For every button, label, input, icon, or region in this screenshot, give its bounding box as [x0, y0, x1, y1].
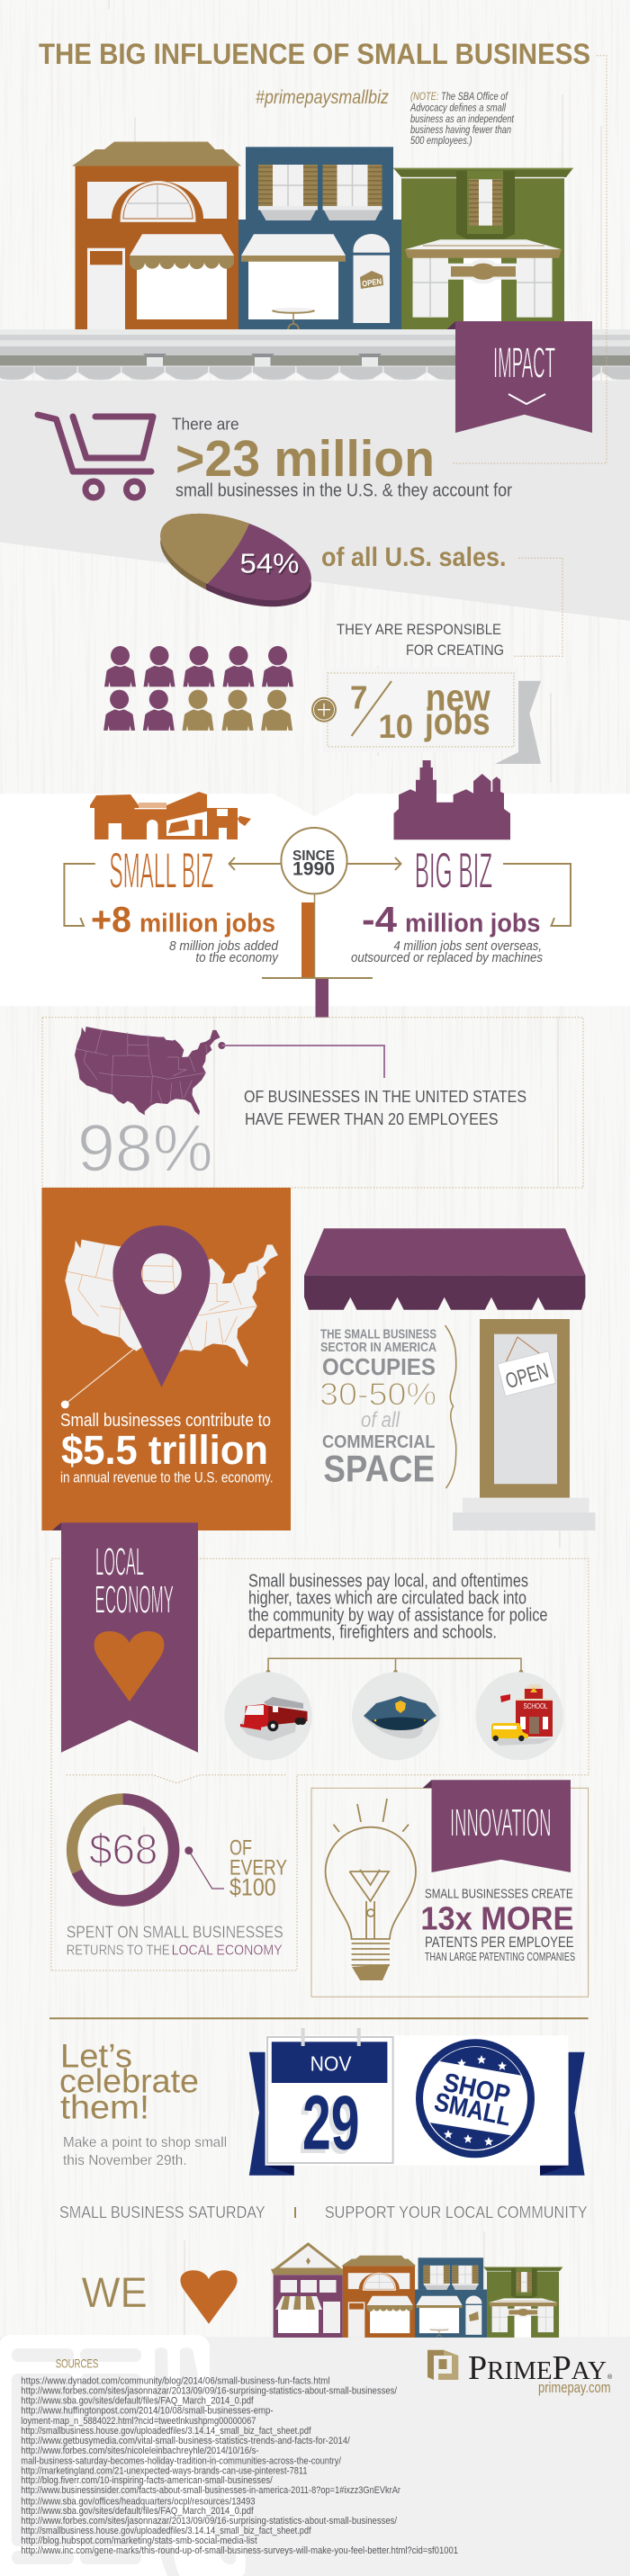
chart: ten person pictogram — [104, 646, 293, 731]
connector: services tree — [266, 1658, 523, 1674]
callout: 7 of 10 new jobs — [311, 668, 541, 764]
note: SBA definition: 500 employees.) — [410, 136, 472, 147]
icon: police hat — [352, 1672, 439, 1760]
note: SBA definition: Advocacy defines a small — [410, 103, 506, 113]
note: SBA definition: (NOTE: The SBA Office of — [410, 92, 508, 103]
text: sources list: http://www.businessinsider.com/facts-about-small-businesses-in-america-2011-8?op=1#ixzz3GnEVkrAr — [21, 2485, 400, 2496]
text: revenue stat: in annual revenue to the U.S. economy. — [60, 1469, 274, 1486]
badge: since 1990: SINCE — [292, 848, 335, 864]
icon: orange heart — [180, 2270, 238, 2324]
text: sources list: http://marketingland.com/21-unexpected-ways-brands-can-use-pinterest-7811 — [21, 2465, 308, 2476]
icon: calendar nov 29 — [267, 2028, 393, 2170]
stat: 23 million small businesses: small businesses in the U.S. & they account for — [176, 481, 512, 501]
illustration: open door: OPEN — [503, 1359, 551, 1394]
text: 13x more patents: SMALL BUSINESSES CREATE — [425, 1886, 573, 1901]
bracket: big biz — [503, 864, 571, 926]
text: commercial space: of all — [361, 1408, 400, 1432]
map: United States white — [65, 1240, 278, 1367]
chart: 54 percent pie: 54% — [241, 549, 301, 581]
text: returns to local economy: LOCAL ECONOMY — [172, 1943, 283, 1958]
stat: plus 8 million jobs: to the economy — [195, 950, 279, 965]
text: they are responsible: FOR CREATING — [406, 642, 504, 659]
text: small business saturday line: SMALL BUSINESS SATURDAY — [59, 2204, 266, 2221]
icon: fire truck — [224, 1672, 312, 1760]
text: revenue stat: $5.5 trillion — [61, 1427, 268, 1473]
text: sources list: mall-business-saturday-becomes-holiday-tradition-in-communities-across-the-country/ — [21, 2455, 342, 2466]
banner: local economy — [52, 1522, 198, 1753]
icon: school and bus — [475, 1672, 563, 1760]
chart: 68 dollar donut — [72, 1800, 174, 1900]
text: small business saturday line: SUPPORT YOUR LOCAL COMMUNITY — [325, 2204, 588, 2221]
text: sources list: http://smallbusiness.house.gov/uploadedfiles/3.14.14_small_biz_fact_sheet.pdf — [21, 2426, 311, 2437]
text: sources list: SOURCES — [56, 2356, 98, 2371]
note: SBA definition: business having fewer than — [410, 125, 511, 136]
text: local taxes — [248, 1571, 547, 1643]
text: sources list: http://smallbusiness.house.gov/uploadedfiles/3.14.14_small_biz_fact_sheet.pdf — [21, 2526, 311, 2536]
text: small business saturday line — [59, 2204, 588, 2221]
text: of every 100 — [230, 1836, 287, 1901]
stat: 23 million small businesses: There are — [172, 416, 239, 434]
badge: since 1990: 1990 — [292, 859, 335, 880]
icon: light bulb — [326, 1799, 416, 1965]
text: SMALL BIZ — [109, 842, 213, 899]
illustration: storefront row — [72, 142, 573, 329]
icon: shopping cart — [38, 415, 153, 498]
chart: 54 percent pie — [160, 513, 311, 606]
text: commercial space: SPACE — [323, 1448, 435, 1490]
stat: plus 8 million jobs: +8 — [91, 901, 131, 940]
heading: let's celebrate them: Let’s — [60, 2037, 132, 2074]
text: local taxes: the community by way of assistance for police — [248, 1606, 547, 1626]
text: sources list: http://blog.hubspot.com/marketing/stats-smb-social-media-list — [21, 2536, 257, 2546]
icon: calendar nov 29: 29 — [302, 2080, 360, 2166]
illustration: purple awning — [304, 1228, 585, 1310]
bracket: small biz — [64, 864, 95, 926]
text: local taxes: higher, taxes which are circulated back into — [248, 1588, 526, 1608]
text: commercial space — [320, 1326, 436, 1490]
logo: shop small — [416, 2039, 535, 2158]
note: SBA definition — [410, 92, 515, 147]
decoration: brace — [446, 1325, 456, 1488]
text: of every 100: $100 — [230, 1874, 276, 1901]
text: sources list: http://www.forbes.com/sites/nicoleleinbachreyhle/2014/10/16/s- — [21, 2446, 259, 2456]
heading: let's celebrate them: them! — [60, 2088, 149, 2125]
text: commercial space: SECTOR IN AMERICA — [320, 1340, 436, 1355]
stat: plus 8 million jobs: 8 million jobs added — [169, 938, 279, 954]
text: local taxes: departments, firefighters and schools. — [248, 1623, 497, 1643]
chart: 54 percent pie: 54% — [239, 548, 299, 579]
panel: innovation — [311, 1780, 589, 1997]
callout: 7 of 10 new jobs: new — [426, 676, 490, 718]
map: United States — [75, 1027, 220, 1115]
text: commercial space: 30-50% — [320, 1378, 436, 1413]
text: sources list: http://www.huffingtonpost.com/2014/10/08/small-businesses-emp- — [21, 2406, 274, 2417]
panel: gray impact background — [0, 381, 630, 621]
text: make a point: Make a point to shop small — [63, 2135, 227, 2150]
logo: PrimePay: PRIMEPAY — [468, 2349, 607, 2387]
banner: innovation — [423, 1780, 571, 1872]
stat: 23 million small businesses — [172, 416, 512, 501]
banner: local economy: LOCAL — [95, 1540, 144, 1584]
text: fewer than 20 employees: HAVE FEWER THAN 20 EMPLOYEES — [245, 1110, 499, 1128]
callout line — [184, 1846, 224, 1889]
text: BIG BIZ — [415, 842, 492, 899]
text: they are responsible: THEY ARE RESPONSIBLE — [337, 621, 501, 638]
stat: 23 million small businesses: >23 million — [176, 430, 435, 488]
text: commercial space: OCCUPIES — [322, 1353, 436, 1380]
text: commercial space: COMMERCIAL — [322, 1432, 436, 1452]
illustration: open door — [453, 1319, 596, 1530]
divider — [50, 2017, 589, 2019]
banner: navy ribbon — [249, 2035, 585, 2176]
title: THE BIG INFLUENCE OF SMALL BUSINESS — [39, 38, 590, 70]
text: sources list: https://www.dynadot.com/community/blog/2014/06/small-business-fun-facts.html — [21, 2375, 330, 2386]
text: returns to local economy — [67, 1923, 284, 1958]
stat: minus 4 million jobs: outsourced or replaced by machines — [351, 950, 543, 965]
stat: 98 percent: 98% — [77, 1111, 213, 1186]
logo: PrimePay — [428, 2349, 613, 2396]
stat: minus 4 million jobs: -4 — [362, 901, 398, 940]
connector: dotted path from title to cart — [452, 56, 607, 463]
text: sources list: loyment-map_n_5884022.html?ncid=tweetlnkushpmg00000067 — [21, 2416, 256, 2427]
icon: map pin — [112, 1225, 211, 1387]
note: SBA definition: business as an independent — [410, 114, 515, 125]
illustration: small shop row — [271, 2244, 562, 2338]
stat: minus 4 million jobs: million jobs — [405, 910, 540, 938]
text: sources list — [21, 2356, 458, 2556]
text: local taxes: Small businesses pay local, and oftentimes — [248, 1571, 528, 1591]
logo: shop small: SHOP — [441, 2069, 513, 2110]
connector: dotted path to job stat — [514, 558, 562, 656]
text: sources list: http://blog.fiverr.com/10-inspiring-facts-american-small-businesses/ — [21, 2475, 274, 2486]
text: sources list: http://www.sba.gov/offices/headquarters/ocpl/resources/13493 — [21, 2496, 256, 2507]
badge: since 1990 — [281, 828, 347, 893]
callout line from map — [218, 1042, 384, 1078]
text: returns to local economy: SPENT ON SMALL BUSINESSES — [67, 1923, 284, 1941]
icon: heart — [94, 1631, 164, 1701]
stat: plus 8 million jobs — [91, 901, 279, 965]
text: sources list: http://www.sba.gov/sites/default/files/FAQ_March_2014_0.pdf — [21, 2396, 255, 2407]
banner: impact — [446, 321, 592, 433]
panel: 98 percent — [42, 1018, 583, 1188]
stat: minus 4 million jobs — [351, 901, 543, 965]
text: revenue stat — [60, 1411, 274, 1486]
text: fewer than 20 employees — [244, 1088, 526, 1128]
chart: job change bars — [262, 893, 373, 1018]
hashtag: #primepaysmallbiz — [256, 87, 389, 108]
panel outline: local economy — [51, 1558, 589, 1970]
heading: let's celebrate them: celebrate — [59, 2063, 199, 2100]
icon: school and bus: SCHOOL — [524, 1702, 548, 1710]
text: they are responsible — [337, 621, 504, 659]
text: of every 100: OF — [230, 1836, 252, 1861]
text: make a point — [63, 2135, 227, 2168]
text: commercial space: THE SMALL BUSINESS — [320, 1326, 436, 1342]
text: 13x more patents: PATENTS PER EMPLOYEE — [425, 1934, 574, 1951]
heading: let's celebrate them — [59, 2037, 199, 2125]
logo: PrimePay: ® — [608, 2374, 613, 2381]
text: fewer than 20 employees: OF BUSINESSES IN THE UNITED STATES — [244, 1088, 526, 1106]
stat: minus 4 million jobs: 4 million jobs sent overseas, — [394, 938, 542, 954]
text: revenue stat: Small businesses contribute to — [60, 1411, 271, 1431]
logo: shop small: SMALL — [432, 2087, 513, 2132]
callout: 7 of 10 new jobs: 7 — [350, 678, 367, 715]
text: 13x more patents — [420, 1886, 575, 1963]
text: of every 100: EVERY — [230, 1855, 287, 1880]
icon: calendar nov 29: NOV — [310, 2052, 352, 2076]
text: sources list: http://www.getbusymedia.com/vital-small-business-statistics-trends-and-facts-for-2014/ — [21, 2436, 351, 2446]
callout: 7 of 10 new jobs: jobs — [424, 700, 490, 742]
text: sources list: http://www.forbes.com/sites/jasonnazar/2013/09/09/16-surprising-statistics-about-small-businesses/ — [21, 2385, 398, 2396]
text: we: WE — [82, 2268, 148, 2316]
text: make a point: this November 29th. — [63, 2153, 187, 2168]
illustration: storefront row: OPEN — [362, 277, 382, 288]
arrow: right to big biz — [347, 857, 401, 870]
arrow: left to small biz — [229, 857, 281, 870]
text: of all US sales: of all U.S. sales. — [321, 543, 506, 572]
illustration: sidewalk — [0, 329, 630, 380]
callout line — [61, 1347, 137, 1409]
text: sources list: http://www.sba.gov/sites/default/files/FAQ_March_2014_0.pdf — [21, 2506, 255, 2517]
banner: local economy: ECONOMY — [94, 1577, 174, 1621]
stat: plus 8 million jobs: million jobs — [140, 910, 275, 938]
text: sources list: http://www.forbes.com/sites/jasonnazar/2013/09/09/16-surprising-statistics-about-small-businesses/ — [21, 2516, 398, 2527]
chart: 68 dollar donut: $68 — [89, 1826, 158, 1873]
text: 13x more patents: 13x MORE — [420, 1899, 573, 1936]
callout: 7 of 10 new jobs: 10 — [378, 708, 413, 745]
text: returns to local economy: RETURNS TO THE — [67, 1943, 170, 1958]
icon: calendar nov 29: 29 — [299, 2085, 356, 2170]
panel: white small biz vs big biz band — [0, 794, 630, 1006]
icon: big business skyline — [394, 760, 510, 839]
icon: small storefront silhouette — [90, 792, 251, 839]
panel: footer — [0, 2335, 630, 2576]
panel: 5.5 trillion — [41, 1188, 291, 1530]
text: sources list: http://www.inc.com/gene-marks/this-round-up-of-small-business-surveys-will-make-you-feel-better.html?cid=sf01001 — [21, 2545, 458, 2556]
